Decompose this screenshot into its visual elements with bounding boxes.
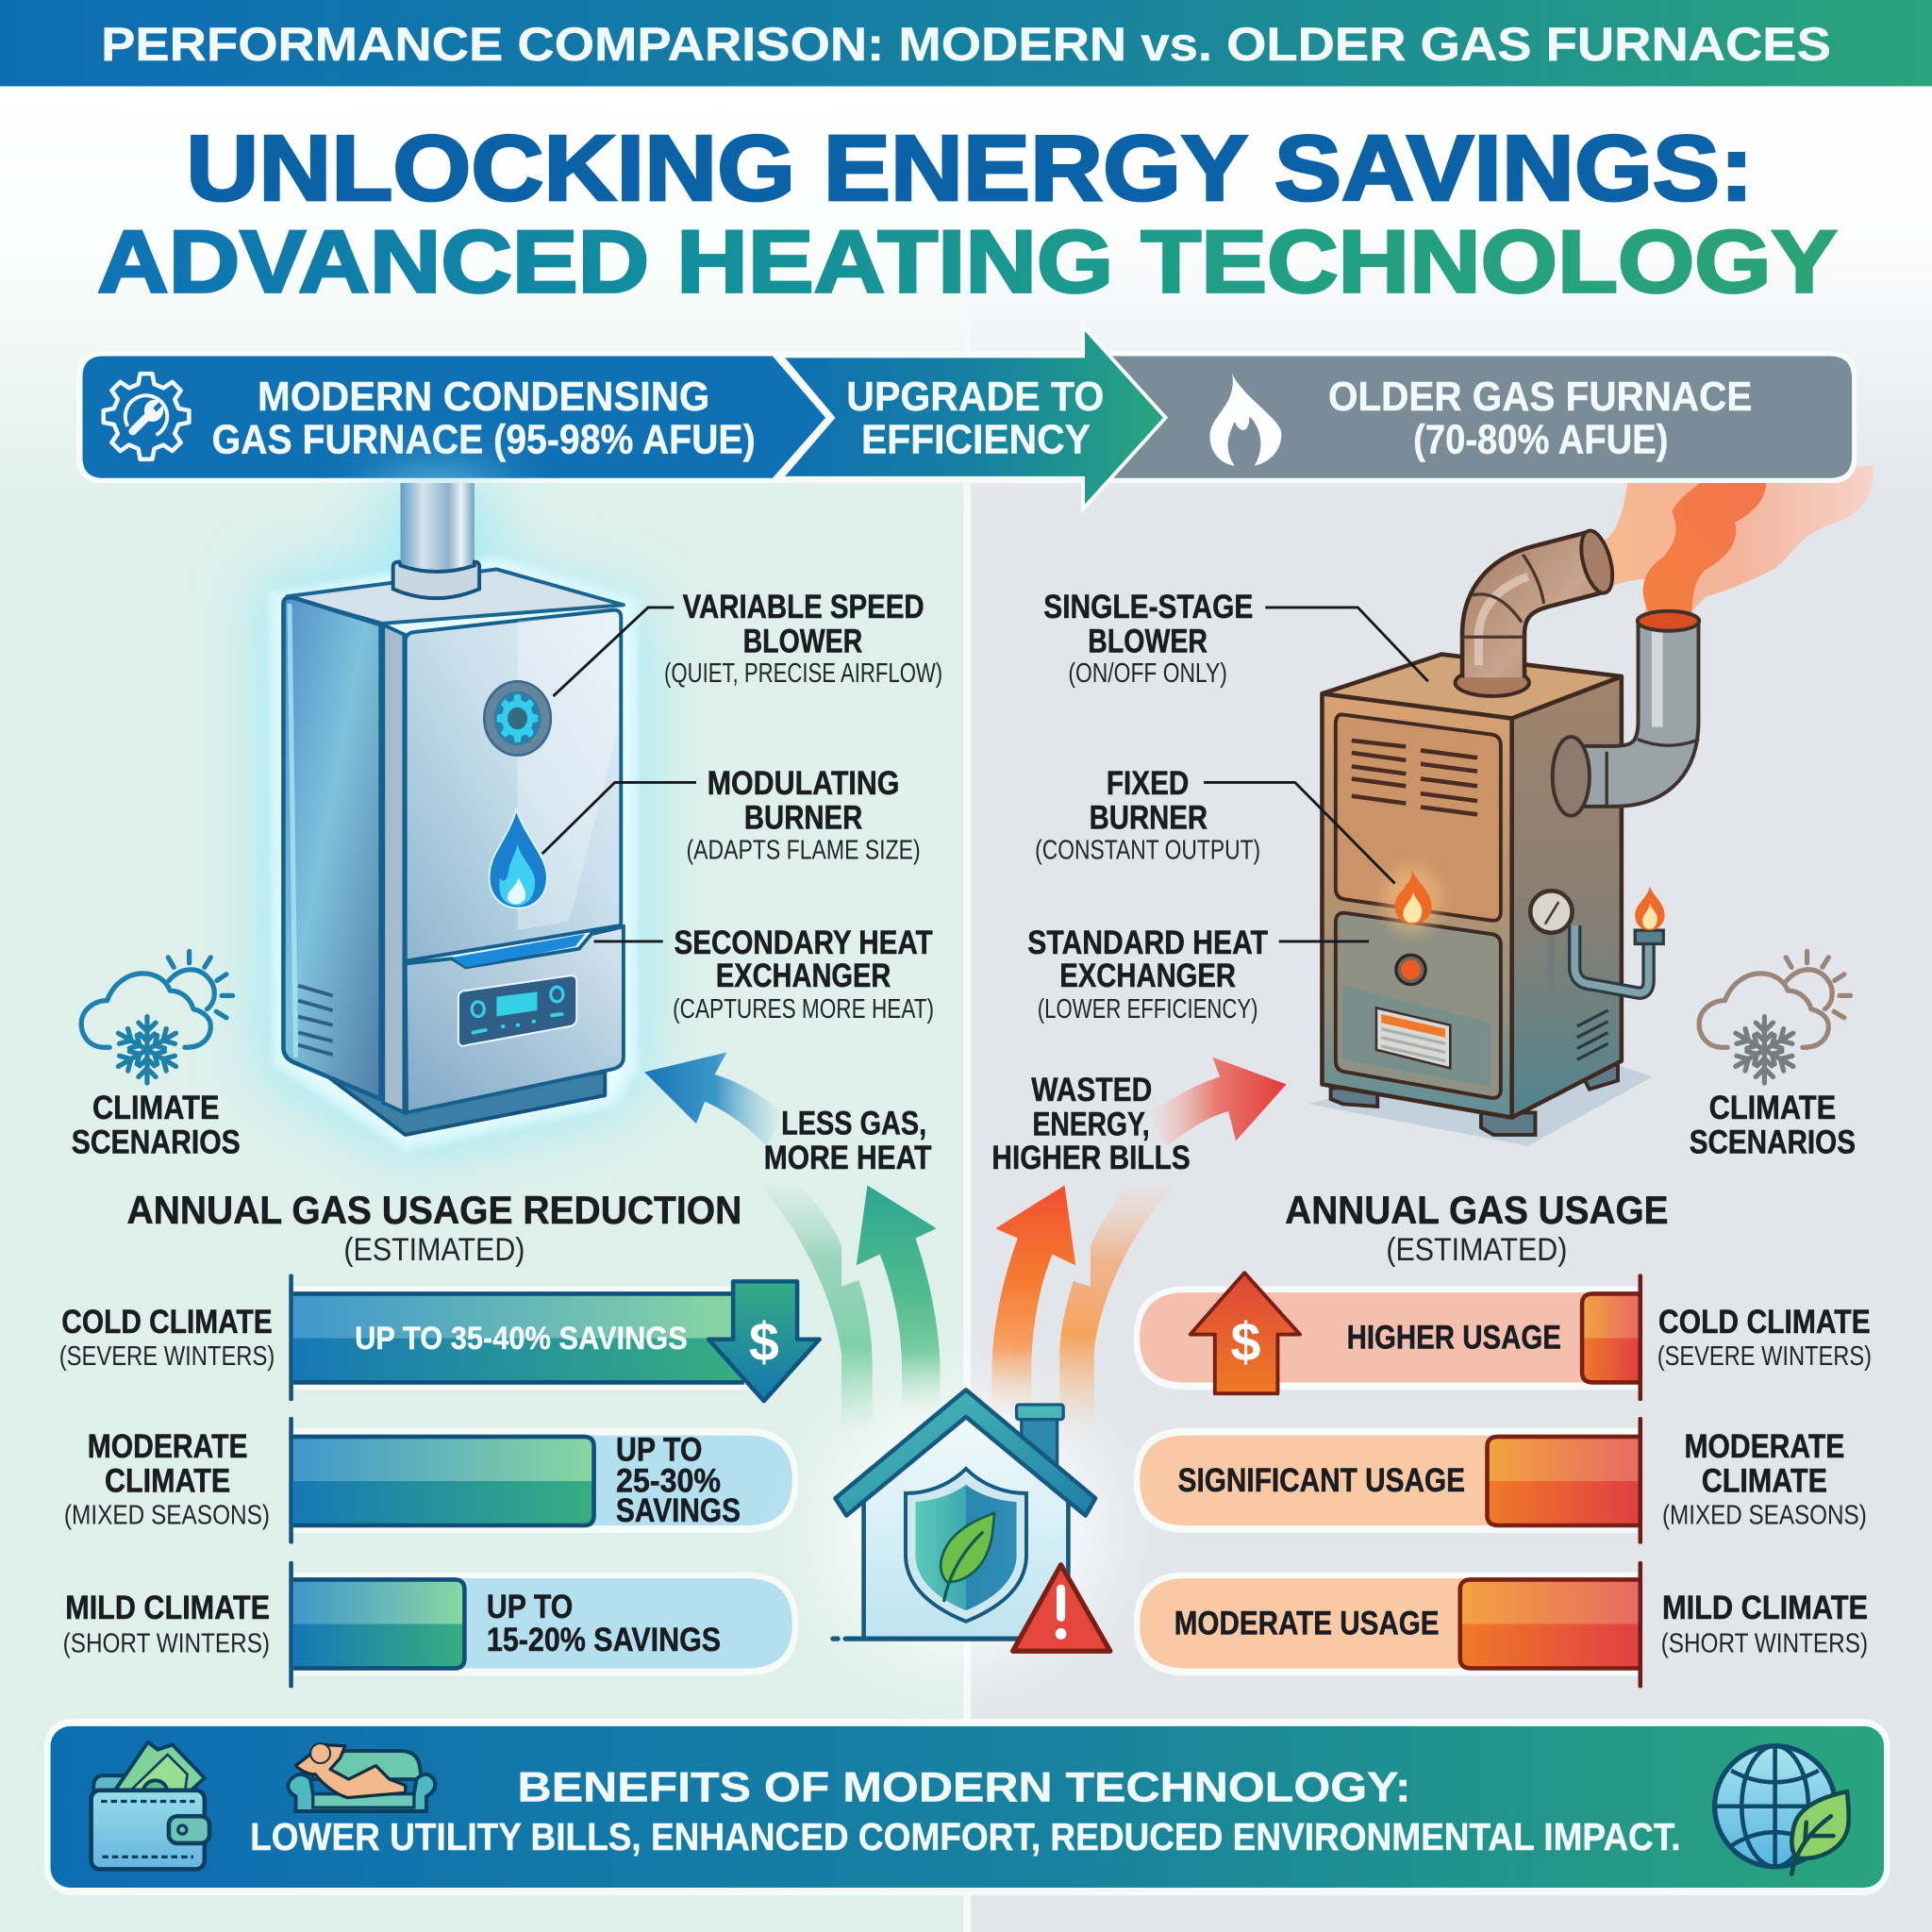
benefits text: LOWER UTILITY BILLS, ENHANCED COMFORT, REDUCED ENVIRONMENTAL IMPACT. xyxy=(250,1815,1681,1858)
blue light strip xyxy=(452,934,585,967)
leaf xyxy=(941,1513,994,1602)
row: cold climate usage: HIGHER USAGE xyxy=(1347,1320,1561,1357)
vents xyxy=(298,986,333,1055)
flue collar xyxy=(393,562,479,598)
furnace base xyxy=(297,1054,605,1135)
house walls xyxy=(864,1405,1068,1639)
header text: PERFORMANCE COMPARISON: MODERN vs. OLDER GAS FURNACES xyxy=(101,18,1831,71)
callout: modulating burner: (ADAPTS FLAME SIZE) xyxy=(687,835,921,865)
upper door xyxy=(1336,714,1501,921)
icon: house with shield and warning xyxy=(824,1390,1110,1663)
icon: climate right xyxy=(1699,951,1851,1083)
climate scenarios right: SCENARIOS xyxy=(1690,1124,1856,1161)
arrow: wasted energy xyxy=(1148,1058,1287,1146)
indicator button xyxy=(1396,955,1425,985)
callout: single-stage blower: BLOWER xyxy=(1088,624,1208,660)
row: mild climate usage: (SHORT WINTERS) xyxy=(1661,1629,1868,1659)
benefits bar xyxy=(44,1719,1890,1895)
rating plate xyxy=(1376,1008,1450,1068)
rising arrows: savings xyxy=(760,1185,941,1434)
rising arrows: usage xyxy=(991,1185,1175,1434)
arrow: less gas xyxy=(644,1052,784,1146)
heading: annual gas usage: ANNUAL GAS USAGE xyxy=(1285,1188,1668,1232)
top panel xyxy=(1322,655,1622,718)
burner flame xyxy=(1382,865,1441,934)
copper flue xyxy=(1456,527,1618,696)
row: mild climate usage xyxy=(1134,1561,1868,1688)
climate scenarios left: SCENARIOS xyxy=(72,1124,241,1161)
chart: usage bars xyxy=(1134,1273,1872,1688)
label: less gas more heat xyxy=(764,1105,932,1176)
chart: savings bars xyxy=(59,1274,820,1688)
row: mild climate usage: MODERATE USAGE xyxy=(1174,1606,1440,1642)
row: cold climate: (SEVERE WINTERS) xyxy=(59,1341,275,1372)
comparison banner: GAS FURNACE (95-98% AFUE) xyxy=(212,418,756,463)
callout: fixed burner: FIXED xyxy=(1107,765,1189,802)
icon: gear with wrench xyxy=(104,374,189,459)
row: moderate climate: CLIMATE xyxy=(105,1463,230,1500)
row: moderate climate usage: CLIMATE xyxy=(1702,1463,1827,1500)
upper front panel xyxy=(406,610,621,961)
row: mild climate: 15-20% SAVINGS xyxy=(487,1622,721,1658)
smoke from old furnace flue xyxy=(1602,466,1874,612)
label: wasted energy xyxy=(991,1072,1191,1176)
callout: standard heat exchanger xyxy=(1027,924,1369,1024)
right side panel xyxy=(1512,676,1622,1118)
icon: down arrow with dollar: $ xyxy=(749,1312,779,1373)
row: cold climate usage xyxy=(1134,1273,1872,1401)
callouts: old furnace xyxy=(1027,589,1428,1024)
callout: variable speed blower: BLOWER xyxy=(743,624,862,660)
blower icon xyxy=(484,681,551,756)
callout: fixed burner: BURNER xyxy=(1090,799,1208,836)
label: wasted energy: WASTED xyxy=(1031,1072,1152,1108)
lower door xyxy=(1336,913,1501,1098)
comparison banner xyxy=(76,326,1857,508)
callout: variable speed blower xyxy=(553,589,942,696)
row: moderate climate: UP TO xyxy=(616,1431,702,1468)
callout: standard heat exchanger: STANDARD HEAT xyxy=(1027,924,1268,961)
climate scenarios right: CLIMATE xyxy=(1709,1090,1836,1126)
ground line xyxy=(833,1637,1023,1641)
callout: variable speed blower: (QUIET, PRECISE AIRFLOW) xyxy=(664,658,942,689)
row: moderate climate usage: SIGNIFICANT USAGE xyxy=(1178,1462,1465,1499)
climate scenarios left xyxy=(72,951,241,1161)
furnace top xyxy=(287,569,624,624)
callout: modulating burner xyxy=(542,765,921,865)
furnace feet xyxy=(1331,1061,1618,1135)
icon: up arrow with dollar: $ xyxy=(1231,1312,1261,1373)
row: mild climate: (SHORT WINTERS) xyxy=(63,1629,270,1659)
label: less gas more heat: MORE HEAT xyxy=(764,1140,932,1176)
grey flue xyxy=(1553,611,1699,816)
callout: fixed burner xyxy=(1035,765,1395,883)
gas line with gauge xyxy=(1530,886,1665,993)
callout: modulating burner: BURNER xyxy=(744,799,862,836)
benefits text xyxy=(250,1765,1681,1858)
control panel xyxy=(458,975,576,1046)
side vents xyxy=(1577,1010,1607,1059)
warning triangle xyxy=(1013,1565,1110,1651)
roof xyxy=(836,1390,1095,1516)
row: cold climate xyxy=(59,1274,820,1401)
row: moderate climate usage: (MIXED SEASONS) xyxy=(1662,1501,1867,1531)
banner text right: OLDER GAS FURNACE xyxy=(1328,375,1752,420)
shield xyxy=(906,1469,1026,1622)
old furnace illustration xyxy=(1308,527,1699,1146)
icon: flame xyxy=(1209,374,1281,466)
heading: annual gas usage xyxy=(1285,1188,1668,1268)
icon: climate left xyxy=(81,951,233,1083)
row: cold climate usage: COLD CLIMATE xyxy=(1658,1304,1871,1341)
row: mild climate usage: MILD CLIMATE xyxy=(1662,1590,1868,1626)
row: moderate climate: SAVINGS xyxy=(616,1492,741,1529)
callouts: modern furnace xyxy=(542,589,942,1024)
icon: relaxing on couch xyxy=(288,1743,435,1811)
banner text left: MODERN CONDENSING xyxy=(258,375,709,420)
callout: secondary heat exchanger: (CAPTURES MORE HEAT) xyxy=(673,994,934,1024)
row: mild climate xyxy=(63,1561,798,1688)
callout: variable speed blower: VARIABLE SPEED xyxy=(683,589,924,625)
row: moderate climate usage: MODERATE xyxy=(1684,1428,1844,1465)
panel: older furnace header xyxy=(1109,356,1852,478)
callout: fixed burner: (CONSTANT OUTPUT) xyxy=(1035,835,1260,865)
row: cold climate: COLD CLIMATE xyxy=(61,1304,273,1341)
callout: single-stage blower: SINGLE-STAGE xyxy=(1043,589,1253,625)
banner white outline xyxy=(76,351,1857,483)
icon: up arrow with dollar xyxy=(1191,1273,1300,1393)
heading: annual gas usage: (ESTIMATED) xyxy=(1386,1232,1567,1268)
climate scenarios right xyxy=(1690,951,1856,1161)
front panel xyxy=(1322,693,1512,1118)
burner flame icon xyxy=(490,809,547,908)
callout: standard heat exchanger: EXCHANGER xyxy=(1059,958,1236,994)
icon: wallet with cash xyxy=(92,1742,209,1869)
title: UNLOCKING ENERGY SAVINGS: xyxy=(186,116,1754,220)
callout: secondary heat exchanger xyxy=(594,924,934,1024)
floor shadow xyxy=(1308,1059,1653,1146)
callout: secondary heat exchanger: EXCHANGER xyxy=(716,958,891,994)
comparison banner: (70-80% AFUE) xyxy=(1413,418,1668,463)
label: wasted energy: ENERGY, xyxy=(1033,1107,1150,1143)
arrow: upgrade xyxy=(781,326,1166,508)
panel: modern furnace header xyxy=(83,356,825,478)
row: cold climate usage: (SEVERE WINTERS) xyxy=(1657,1341,1872,1372)
callout: secondary heat exchanger: SECONDARY HEAT xyxy=(674,924,933,961)
row: cold climate: UP TO 35-40% SAVINGS xyxy=(355,1321,688,1357)
callout: single-stage blower: (ON/OFF ONLY) xyxy=(1068,658,1227,689)
benefits text: BENEFITS OF MODERN TECHNOLOGY: xyxy=(518,1765,1411,1811)
callout: single-stage blower xyxy=(1043,589,1428,689)
label: less gas more heat: LESS GAS, xyxy=(781,1105,926,1141)
banner text center: UPGRADE TO xyxy=(846,375,1104,420)
row: moderate climate usage xyxy=(1134,1417,1867,1544)
title xyxy=(97,116,1837,311)
lower front panel xyxy=(406,926,624,1112)
climate scenarios left: CLIMATE xyxy=(92,1090,219,1126)
flue pipe xyxy=(400,483,475,581)
modern furnace illustration xyxy=(258,483,647,1158)
heading: annual gas usage reduction: ANNUAL GAS USAGE REDUCTION xyxy=(127,1188,741,1232)
label: wasted energy: HIGHER BILLS xyxy=(991,1140,1191,1176)
row: mild climate: MILD CLIMATE xyxy=(65,1590,270,1626)
heading: annual gas usage reduction: (ESTIMATED) xyxy=(343,1232,525,1268)
louvres xyxy=(1352,741,1477,814)
row: moderate climate: 25-30% xyxy=(616,1463,721,1500)
row: moderate climate: (MIXED SEASONS) xyxy=(64,1501,270,1531)
chimney xyxy=(1017,1405,1063,1478)
callout: modulating burner: MODULATING xyxy=(708,765,899,802)
corner strip xyxy=(383,625,404,1112)
row: mild climate: UP TO xyxy=(487,1589,573,1625)
callout: standard heat exchanger: (LOWER EFFICIENCY) xyxy=(1038,994,1258,1024)
row: moderate climate xyxy=(64,1417,798,1544)
icon: globe with leaf xyxy=(1715,1746,1849,1874)
header bar xyxy=(0,0,1932,86)
title: ADVANCED HEATING TECHNOLOGY xyxy=(97,212,1837,311)
heading: annual gas usage reduction xyxy=(127,1188,741,1268)
row: moderate climate: MODERATE xyxy=(88,1428,248,1465)
icon: down arrow with dollar xyxy=(708,1281,820,1401)
comparison banner: EFFICIENCY xyxy=(861,418,1091,463)
side panel xyxy=(283,597,381,1099)
